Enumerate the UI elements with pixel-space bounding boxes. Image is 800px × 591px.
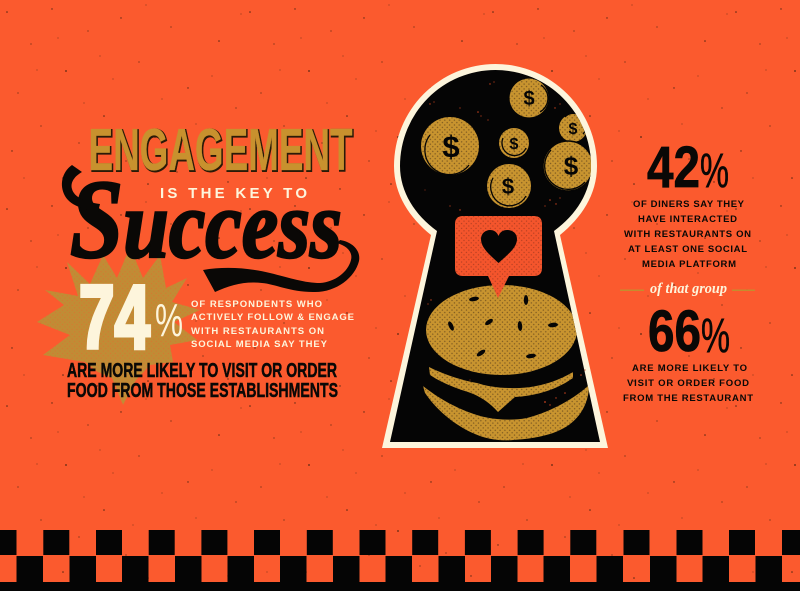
stat: 42%: % <box>700 145 729 198</box>
text: visit or order <box>623 363 753 404</box>
stat: 66%: 66 <box>648 299 701 364</box>
text: respondents: WITH RESTAURANTS ON <box>191 326 324 337</box>
divider: of that group: of that group <box>650 281 727 297</box>
text: diners interacted: AT LEAST ONE SOCIAL <box>628 244 747 255</box>
text: diners interacted: MEDIA PLATFORM <box>642 259 736 270</box>
subheading: IS THE KEY TO <box>160 185 307 202</box>
headline: Engagement: ENGAGEMENT <box>88 117 352 183</box>
seeds <box>447 295 558 359</box>
starburst badge <box>37 247 200 405</box>
headline: Engagement: ENGAGEMENT <box>90 118 354 184</box>
text: more likely to visit: ARE MORE LIKELY TO VISIT OR ORDER <box>67 360 337 382</box>
swash: top hook of S <box>62 165 100 212</box>
cheese <box>429 367 573 412</box>
text: respondents <box>191 299 354 350</box>
headline: Engagement <box>88 117 354 184</box>
text: visit or order: FROM THE RESTAURANT <box>623 393 753 404</box>
coins: $ <box>523 88 535 110</box>
top bun <box>426 285 577 375</box>
swash: tail <box>203 240 359 292</box>
text: respondents: SOCIAL MEDIA SAY THEY <box>191 339 328 350</box>
coins: $ <box>502 174 514 199</box>
stat: 66%: % <box>701 310 730 363</box>
keyhole illustration <box>382 64 608 448</box>
icon: heart <box>481 230 517 263</box>
coins: $ <box>564 151 579 181</box>
coins <box>421 78 593 208</box>
text: respondents: ACTIVELY FOLLOW & ENGAGE <box>191 312 354 323</box>
like bubble with heart <box>455 216 542 298</box>
text: respondents: OF RESPONDENTS WHO <box>191 299 322 310</box>
checkerboard strip <box>0 530 800 591</box>
text: diners interacted: OF DINERS SAY THEY <box>633 199 745 210</box>
stat: 74%: % <box>155 294 183 346</box>
text: more likely to visit: FOOD FROM THOSE ESTABLISHMENTS <box>67 380 338 402</box>
text: visit or order: ARE MORE LIKELY TO <box>632 363 747 374</box>
divider: of that group <box>620 281 755 297</box>
script word: Success: Success <box>70 158 342 282</box>
bottom bun <box>423 385 589 440</box>
stat: 42%: 42 <box>647 135 700 200</box>
text: diners interacted: HAVE INTERACTED <box>638 214 737 225</box>
orange ink flecks <box>424 81 586 406</box>
text: diners interacted: WITH RESTAURANTS ON <box>624 229 751 240</box>
text: visit or order: VISIT OR ORDER FOOD <box>627 378 749 389</box>
stat: 74%: 74 <box>79 268 150 368</box>
text: diners interacted <box>624 199 751 270</box>
coins: $ <box>510 136 519 153</box>
text: more likely to visit <box>67 360 338 402</box>
coins: $ <box>569 121 578 138</box>
coins: $ <box>442 129 460 164</box>
burger <box>423 285 589 440</box>
